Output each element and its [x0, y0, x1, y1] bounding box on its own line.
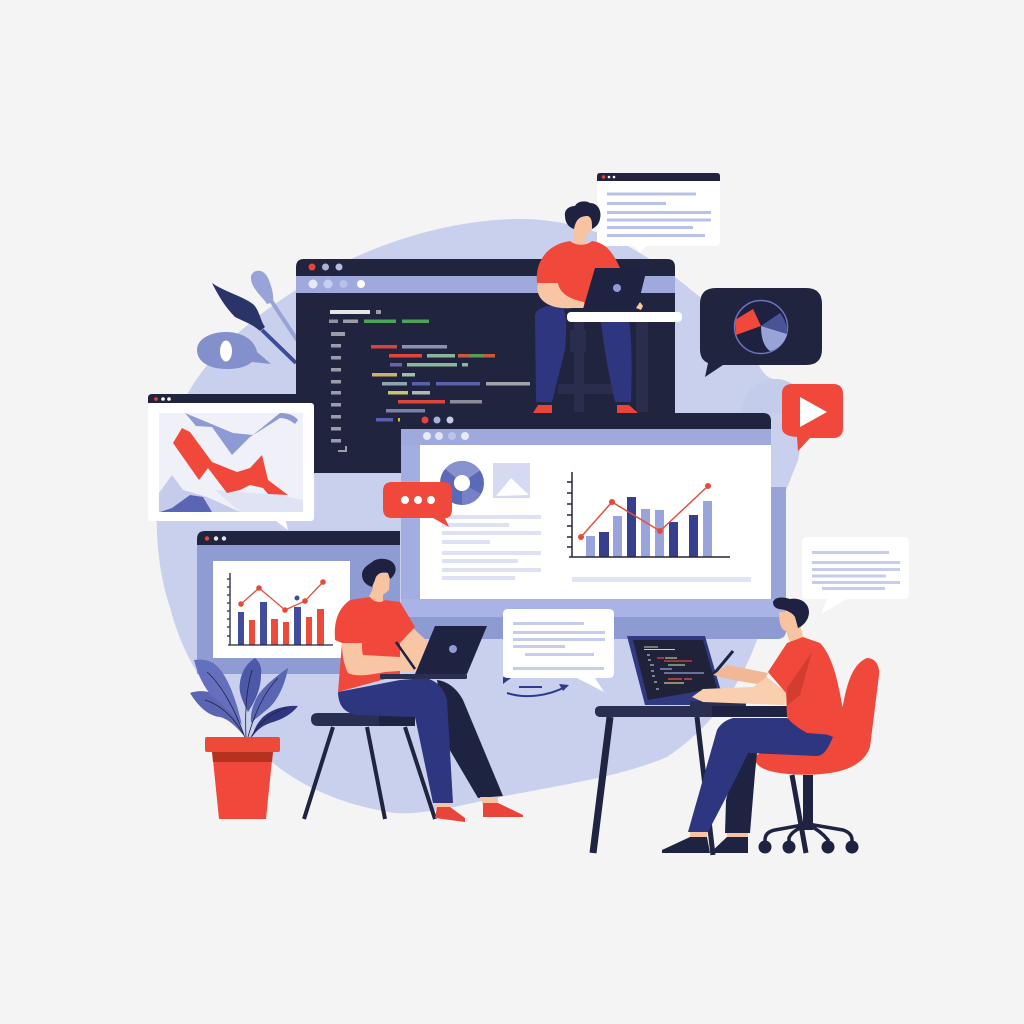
shoes — [533, 405, 552, 413]
person: at desk with laptop, right — [593, 597, 879, 855]
leaves — [190, 658, 298, 737]
neck and face — [779, 612, 803, 643]
back leg — [725, 753, 757, 833]
laptop — [627, 636, 745, 705]
near arm — [692, 677, 787, 705]
icon: potted plant — [190, 658, 298, 819]
shoes — [435, 807, 465, 822]
laptop — [583, 268, 647, 309]
red chat bubble with dots — [383, 482, 452, 527]
pen — [713, 651, 733, 675]
skin ankles — [690, 832, 748, 838]
stool legs — [304, 727, 435, 819]
donut chart — [447, 468, 477, 498]
chair seat and back — [755, 658, 879, 775]
chair base — [758, 775, 858, 854]
panel: left chart window — [148, 394, 314, 530]
speech bubble: top text — [597, 173, 720, 253]
legs — [535, 306, 566, 402]
far arm — [713, 665, 768, 685]
panel: code editor window — [296, 259, 675, 473]
neck and face — [573, 215, 592, 247]
text lines — [442, 515, 541, 580]
image thumbnail — [493, 463, 530, 498]
white shelf — [567, 312, 682, 322]
stool seat — [311, 713, 415, 726]
bar and line chart — [227, 573, 333, 645]
icon: paint brush — [212, 283, 296, 363]
front leg — [688, 718, 833, 832]
front leg — [338, 678, 453, 803]
code lines — [329, 310, 530, 452]
pie chart — [734, 300, 788, 354]
back leg — [437, 680, 503, 798]
hair — [565, 201, 601, 229]
bump circle behind play icon — [742, 379, 808, 445]
area chart — [159, 413, 303, 512]
ankle skin — [434, 797, 498, 809]
shirt — [537, 241, 622, 308]
dark speech bubble with pie chart — [700, 288, 822, 377]
person: sitting on stool with laptop, left — [304, 559, 523, 822]
stool — [558, 322, 648, 412]
hair — [362, 559, 396, 587]
icon: swab tool — [251, 271, 297, 340]
pot — [212, 750, 273, 819]
hand — [636, 302, 643, 310]
arm far — [400, 627, 428, 672]
panel: main dashboard monitor — [400, 413, 803, 639]
pen — [396, 642, 415, 669]
neck and face — [369, 573, 390, 604]
desk legs — [593, 717, 610, 853]
shoes — [662, 837, 710, 853]
icon: eye speech shape — [197, 332, 271, 369]
bar and line chart — [567, 472, 730, 557]
desk top — [595, 706, 787, 717]
icon: video play bubble — [782, 384, 843, 451]
laptop — [415, 626, 487, 674]
shirt — [335, 597, 415, 692]
panel: lower left chart window — [197, 531, 400, 674]
background blob — [157, 219, 806, 813]
arm near — [342, 643, 415, 675]
person: seated on stool with laptop, top — [533, 201, 682, 413]
hair — [773, 597, 809, 628]
speech bubble: center text — [503, 609, 614, 696]
speech bubble: right text — [802, 537, 909, 614]
shirt — [768, 637, 843, 735]
arm — [537, 283, 585, 308]
